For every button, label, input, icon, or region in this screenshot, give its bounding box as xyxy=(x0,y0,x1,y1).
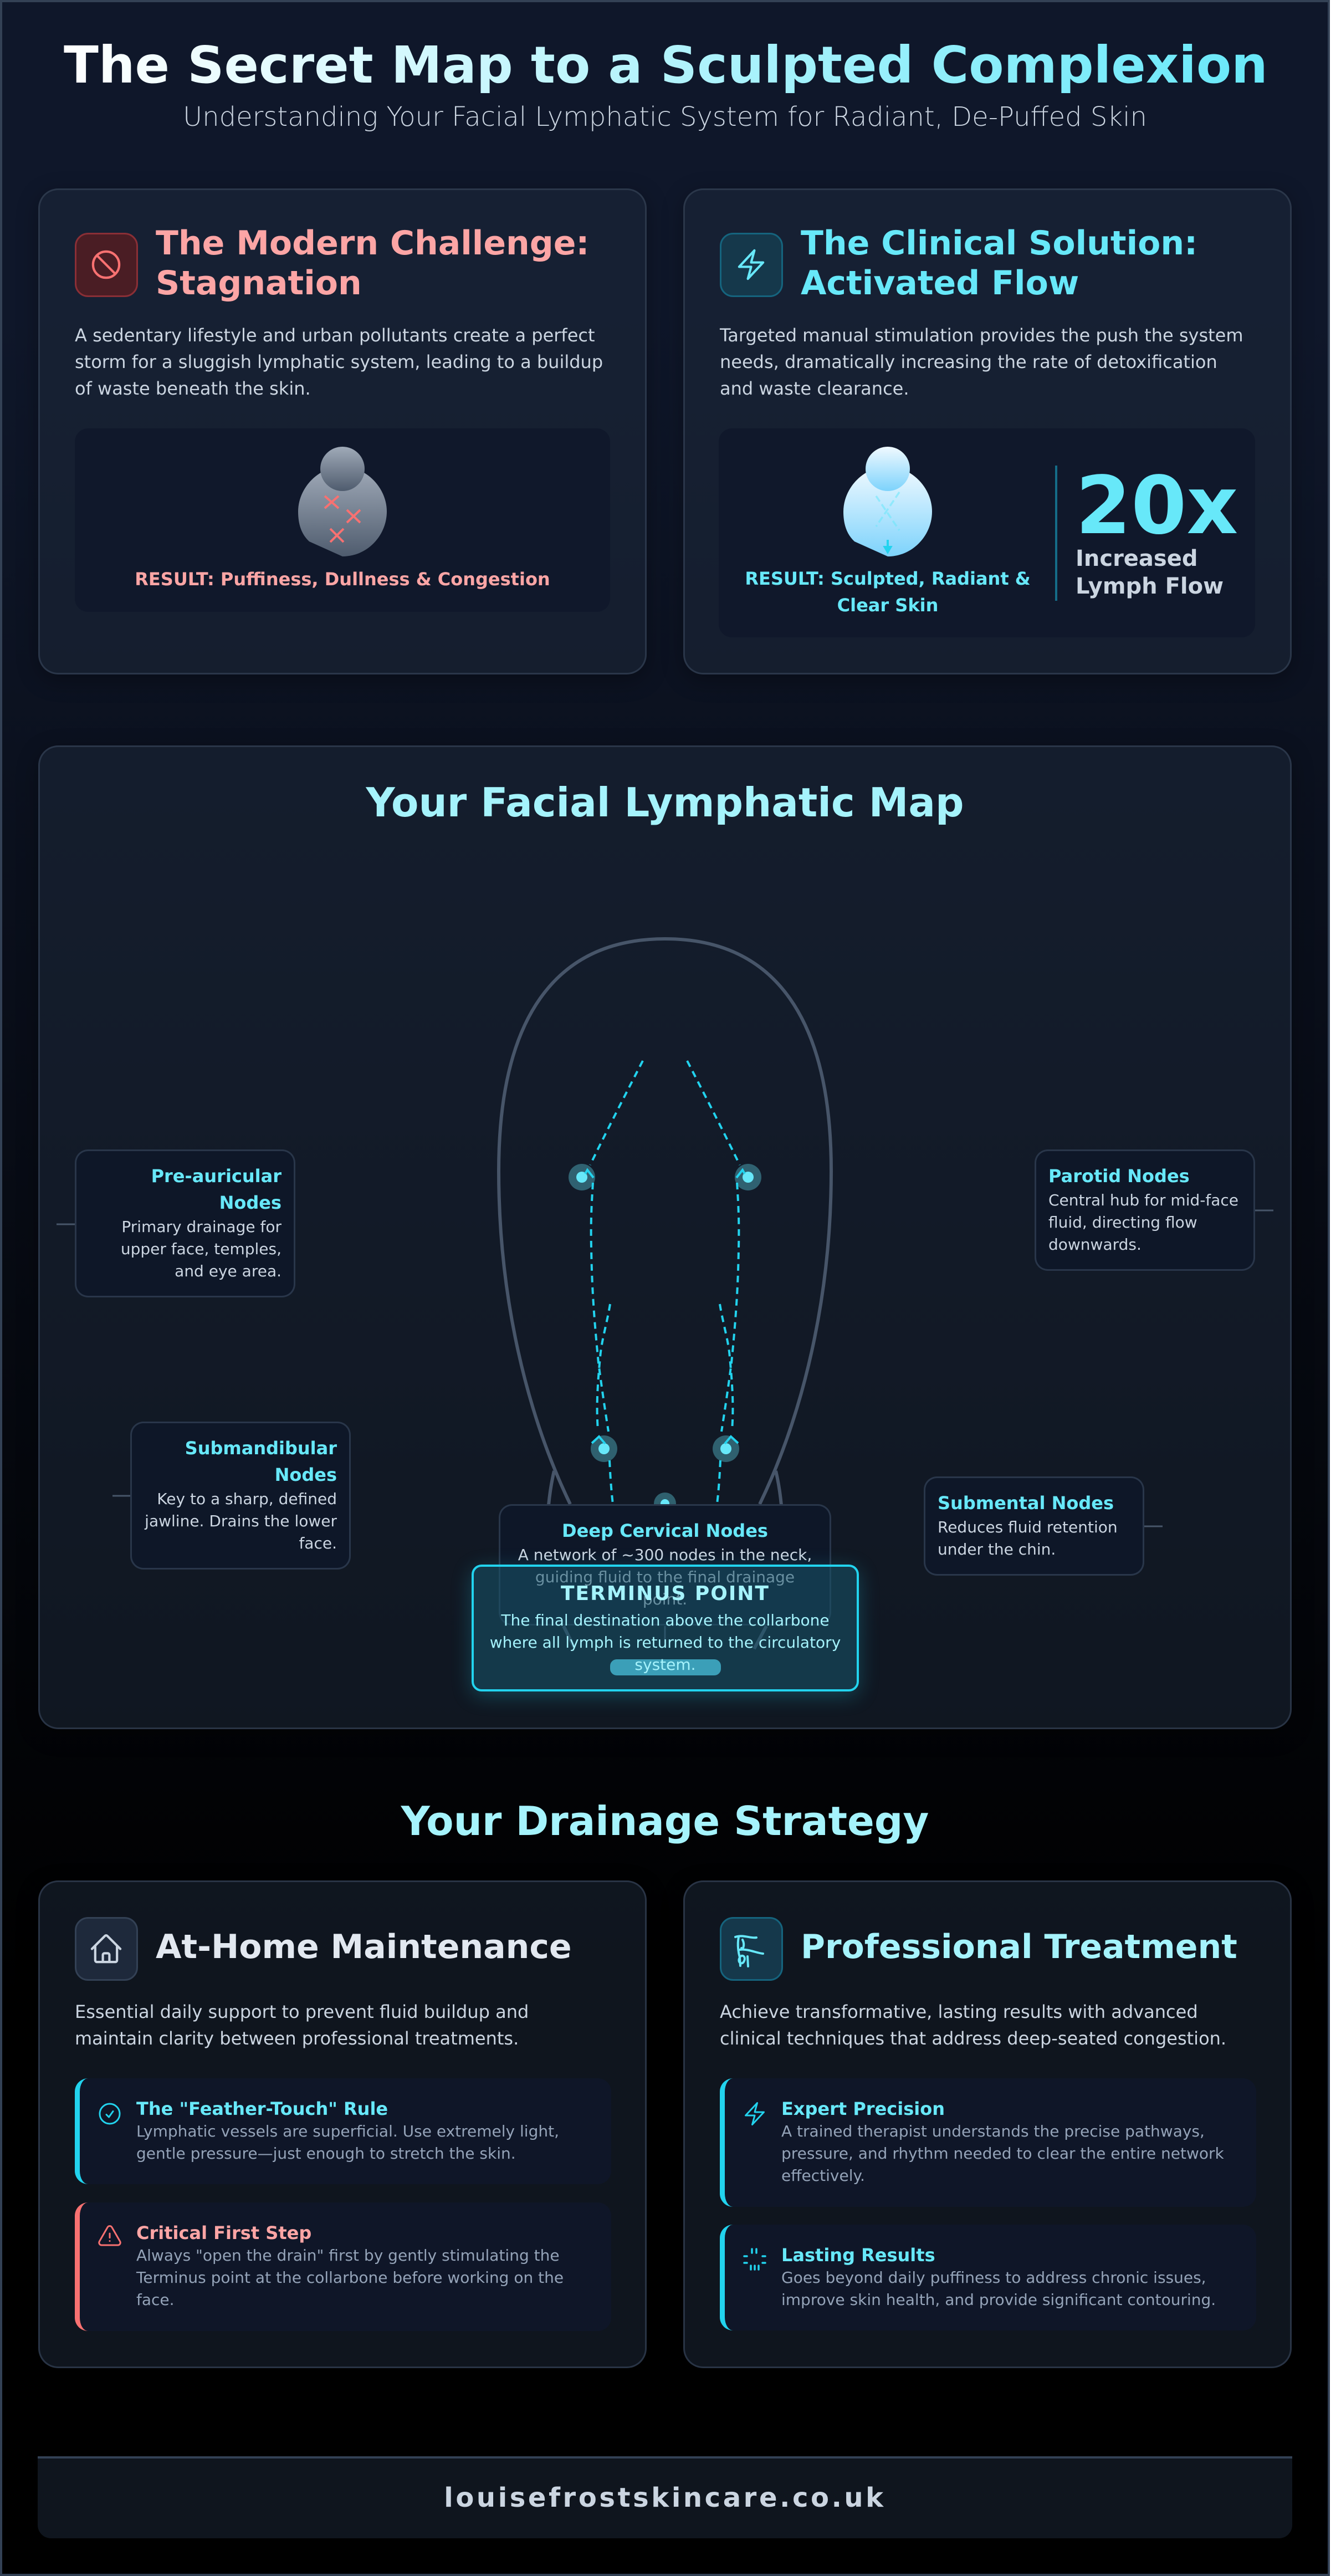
callout: deep cervical nodes: point. xyxy=(643,1590,687,1608)
item: lasting results xyxy=(720,2225,1256,2330)
callout: submental nodes: Reduces fluid retention xyxy=(938,1518,1118,1536)
text: challenge description: storm for a sluggish lymphatic system, leading to a buildup xyxy=(75,351,603,372)
text: professional description xyxy=(720,2001,1226,2049)
item title: Critical First Step xyxy=(136,2222,311,2243)
item: feather-touch rule xyxy=(75,2078,611,2184)
terminus title: TERMINUS POINT xyxy=(561,1582,770,1605)
text: challenge description: of waste beneath the skin. xyxy=(75,378,311,399)
item text: A trained therapist understands the precise pathways, xyxy=(781,2122,1205,2140)
terminus text: The final destination above the collarbone xyxy=(501,1611,830,1629)
callout: pre-auricular nodes xyxy=(75,1149,295,1297)
heading: drainage strategy: Your Drainage Strategy xyxy=(401,1798,929,1844)
text: at-home description xyxy=(75,2001,529,2049)
panel: clinical solution xyxy=(683,188,1292,674)
face outline xyxy=(499,939,831,1649)
result label: activated flow: Clear Skin xyxy=(837,595,938,616)
item text: pressure, and rhythm needed to clear the entire network xyxy=(781,2144,1224,2163)
terminus text xyxy=(490,1611,841,1674)
heading: solution: The Clinical Solution: xyxy=(801,224,1197,263)
callout: submandibular nodes: Submandibular xyxy=(185,1438,337,1459)
item text xyxy=(136,2246,564,2309)
lymph nodes xyxy=(569,1164,761,1515)
text: professional description: Achieve transformative, lasting results with advanced xyxy=(720,2001,1198,2022)
item text: improve skin health, and provide significant contouring. xyxy=(781,2291,1216,2309)
icon: hands xyxy=(720,1917,783,1981)
callout: parotid nodes: fluid, directing flow xyxy=(1048,1213,1197,1231)
icon: warning triangle xyxy=(98,2225,121,2246)
terminus text: system. xyxy=(634,1655,696,1674)
text: challenge description: A sedentary lifestyle and urban pollutants create a perfect xyxy=(75,325,595,346)
text: challenge description xyxy=(75,325,603,399)
item text xyxy=(136,2122,559,2163)
item text xyxy=(781,2268,1216,2309)
icon: home xyxy=(75,1917,138,1981)
callout connectors xyxy=(57,1210,1273,1526)
icon: bolt xyxy=(720,233,783,297)
item: expert precision xyxy=(720,2078,1256,2207)
callout: submandibular nodes: jawline. Drains the lower xyxy=(145,1512,337,1530)
callout: pre-auricular nodes: Nodes xyxy=(219,1192,281,1213)
callout: deep cervical nodes: guiding fluid to the final drainage xyxy=(535,1568,795,1586)
text: solution description: and waste clearance. xyxy=(720,378,909,399)
callout: pre-auricular nodes: Primary drainage for xyxy=(121,1218,281,1236)
item text: Terminus point at the collarbone before working on the xyxy=(136,2268,564,2287)
text: at-home description: maintain clarity between professional treatments. xyxy=(75,2028,519,2049)
panel: at-home maintenance xyxy=(38,1880,647,2368)
icon: bolt small xyxy=(745,2102,765,2126)
heading: solution: Activated Flow xyxy=(801,264,1079,303)
callout: submandibular nodes xyxy=(130,1422,351,1570)
callout: parotid nodes xyxy=(1035,1149,1255,1271)
callout: deep cervical nodes: Deep Cervical Nodes xyxy=(562,1520,768,1541)
callout: submandibular nodes: face. xyxy=(299,1534,337,1552)
icon: sculpted face xyxy=(843,447,932,556)
result label: activated flow: RESULT: Sculpted, Radiant & xyxy=(745,568,1031,589)
lymph pathways left xyxy=(585,1061,643,1504)
callout: pre-auricular nodes: and eye area. xyxy=(175,1262,281,1280)
lymph pathways right xyxy=(687,1061,745,1504)
title: The Secret Map to a Sculpted Complexion xyxy=(64,35,1268,95)
text: professional description: clinical techniques that address deep-seated congestion. xyxy=(720,2028,1226,2049)
stat label: Increased xyxy=(1076,546,1198,571)
footer xyxy=(38,2456,1292,2538)
item text xyxy=(781,2122,1224,2185)
item title: Lasting Results xyxy=(781,2245,935,2266)
stat label: Lymph Flow xyxy=(1076,574,1224,599)
result label: stagnation: RESULT: Puffiness, Dullness & Congestion xyxy=(135,569,550,590)
item title: The "Feather-Touch" Rule xyxy=(136,2098,388,2119)
icon: check circle xyxy=(99,2103,121,2125)
subtitle: Understanding Your Facial Lymphatic System for Radiant, De-Puffed Skin xyxy=(183,101,1147,132)
item title: Expert Precision xyxy=(781,2098,945,2119)
icon: sparkle rays xyxy=(743,2248,766,2271)
icon: congested face xyxy=(298,447,387,556)
heading: challenge: The Modern Challenge: xyxy=(156,224,589,263)
callout: parotid nodes: downwards. xyxy=(1048,1235,1142,1254)
callout: pre-auricular nodes: upper face, temples, xyxy=(121,1240,281,1258)
item text: Goes beyond daily puffiness to address chronic issues, xyxy=(781,2268,1206,2287)
item text: Lymphatic vessels are superficial. Use extremely light, xyxy=(136,2122,559,2140)
heading: map: Your Facial Lymphatic Map xyxy=(366,779,964,826)
text: solution description: Targeted manual stimulation provides the push the system xyxy=(720,325,1243,346)
callout: submental nodes: under the chin. xyxy=(938,1540,1056,1558)
terminus text: where all lymph is returned to the circulatory xyxy=(490,1633,841,1652)
callout: deep cervical nodes: A network of ~300 nodes in the neck, xyxy=(518,1546,812,1564)
heading: challenge: Stagnation xyxy=(156,264,362,303)
result label: activated flow xyxy=(745,568,1031,616)
callout: submental nodes xyxy=(924,1476,1144,1576)
result box: stagnation xyxy=(75,428,610,612)
item: critical first step xyxy=(75,2202,611,2331)
text: solution description xyxy=(719,325,1243,399)
heading: at-home: At-Home Maintenance xyxy=(156,1928,572,1966)
result box: activated flow xyxy=(719,428,1255,637)
heading: solution xyxy=(801,224,1197,303)
heading: challenge xyxy=(156,224,589,303)
terminus marker pill xyxy=(610,1659,721,1675)
divider xyxy=(1055,466,1057,601)
text: at-home description: Essential daily support to prevent fluid buildup and xyxy=(75,2001,529,2022)
callout: parotid nodes: Parotid Nodes xyxy=(1048,1166,1190,1187)
callout: submental nodes: Submental Nodes xyxy=(938,1493,1114,1514)
item text: effectively. xyxy=(781,2166,865,2185)
chart: face lymph diagram xyxy=(57,937,1273,1649)
panel: facial lymphatic map xyxy=(38,745,1292,1729)
panel: modern challenge xyxy=(38,188,647,674)
callout: pre-auricular nodes: Pre-auricular xyxy=(151,1166,281,1187)
icon: ban xyxy=(75,233,138,297)
item text: gentle pressure—just enough to stretch the skin. xyxy=(136,2144,516,2163)
footer url: louisefrostskincare.co.uk xyxy=(444,2482,886,2513)
panel: professional treatment xyxy=(683,1880,1292,2368)
callout: submandibular nodes: Nodes xyxy=(275,1464,337,1485)
item text: face. xyxy=(136,2291,175,2309)
text: solution description: needs, dramatically increasing the rate of detoxification xyxy=(720,351,1217,372)
callout: parotid nodes: Central hub for mid-face xyxy=(1048,1191,1238,1209)
stat: 20x: 20x xyxy=(1076,459,1238,552)
item text: Always "open the drain" first by gently stimulating the xyxy=(136,2246,560,2265)
callout: terminus point xyxy=(472,1565,859,1691)
callout: deep cervical nodes xyxy=(499,1504,831,1626)
callout: submandibular nodes: Key to a sharp, defined xyxy=(157,1490,337,1508)
heading: professional: Professional Treatment xyxy=(801,1928,1237,1966)
stat label xyxy=(1076,546,1224,599)
